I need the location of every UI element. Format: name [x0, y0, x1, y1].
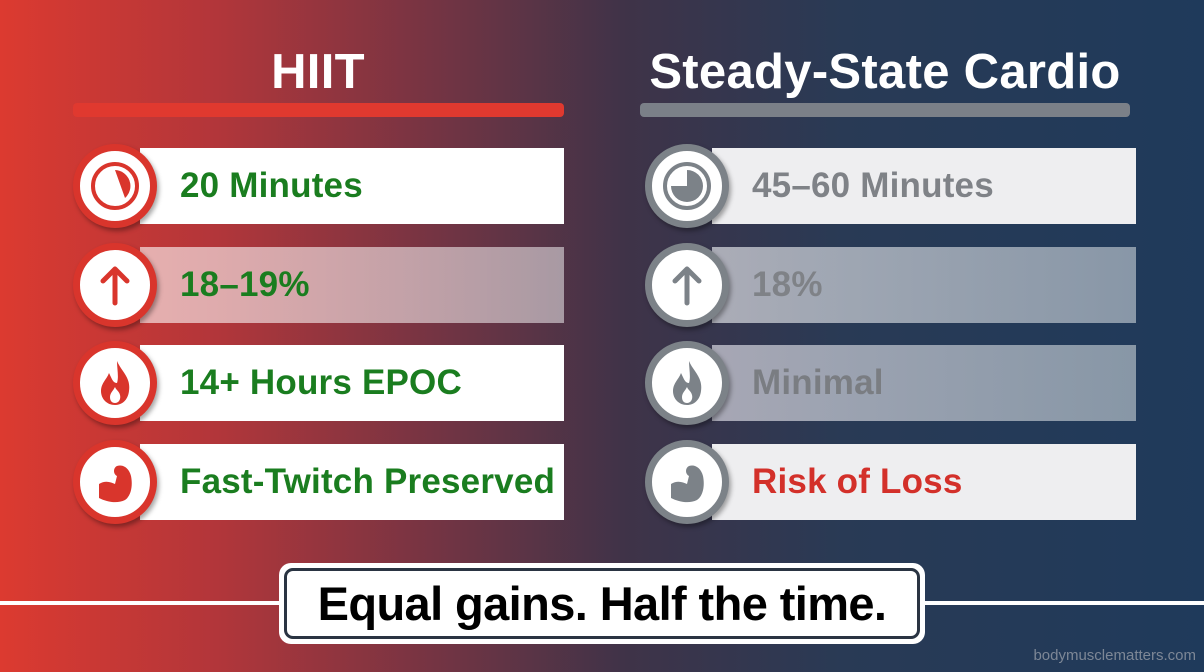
- title: HIIT: HIIT: [271, 45, 365, 99]
- row: risk of loss: Risk of Loss: [752, 462, 963, 501]
- row: 18%: [645, 243, 1136, 331]
- row: 45-60 minutes: 45–60 Minutes: [752, 166, 994, 205]
- callout: tagline: Equal gains. Half the time.: [318, 577, 886, 630]
- title: Steady-State Cardio: Steady-State Cardio: [649, 45, 1121, 99]
- icon: clock: [645, 144, 729, 228]
- watermark: bodymusclematters.com: [1033, 647, 1196, 664]
- icon: clock: [73, 144, 157, 228]
- icon: up arrow: [73, 243, 157, 327]
- row: minimal: Minimal: [752, 363, 884, 402]
- row: minimal: [645, 341, 1136, 429]
- underline: HIIT: [73, 103, 564, 117]
- panel: HIIT rows: [72, 144, 564, 530]
- row: risk of loss: [645, 440, 1136, 528]
- row: 18-19%: [72, 243, 564, 332]
- icon: bicep: [645, 440, 729, 524]
- row: 20 minutes: [72, 144, 564, 234]
- callout: tagline: [279, 563, 925, 644]
- row: fast-twitch: [72, 440, 564, 530]
- row: 18-19%: 18–19%: [180, 265, 310, 304]
- icon: flame: [73, 341, 157, 425]
- divider line: [0, 601, 1204, 605]
- icon: flame: [645, 341, 729, 425]
- panel: steady-state rows: [645, 144, 1136, 528]
- row: fast-twitch: Fast-Twitch Preserved: [180, 462, 555, 501]
- row: EPOC: [72, 341, 564, 430]
- row: 20 minutes: 20 Minutes: [180, 166, 363, 205]
- icon: up arrow: [645, 243, 729, 327]
- row: EPOC: 14+ Hours EPOC: [180, 363, 462, 402]
- icon: bicep: [73, 440, 157, 524]
- row: 45-60 minutes: [645, 144, 1136, 232]
- row: 18%: 18%: [752, 265, 823, 304]
- underline: steady-state: [640, 103, 1130, 117]
